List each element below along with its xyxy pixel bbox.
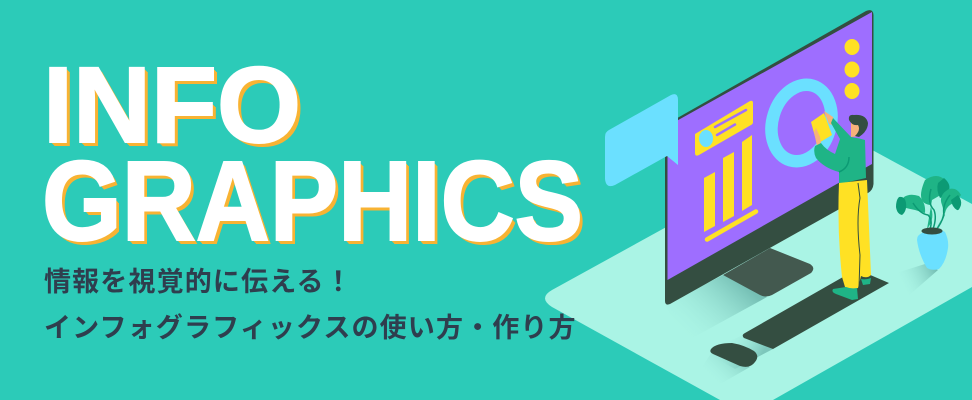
title and subtitle <box>42 44 583 343</box>
plant shadow <box>893 264 938 297</box>
screen <box>668 12 872 280</box>
monitor body <box>665 10 874 305</box>
hair <box>849 115 868 137</box>
trouser seam <box>858 183 860 288</box>
bar chart <box>704 135 756 240</box>
speech bubble <box>605 94 678 186</box>
monitor <box>665 10 874 305</box>
soil <box>922 228 942 234</box>
yellow dots <box>844 39 860 99</box>
profile card <box>695 101 753 156</box>
title: INFO: INFO <box>43 44 301 165</box>
plant <box>896 176 961 270</box>
keyboard <box>743 274 889 349</box>
subtitle line 1: 情報を視覚的に伝える！ <box>44 267 353 297</box>
person <box>811 111 871 300</box>
subtitle line 2: インフォグラフィックスの使い方・作り方 <box>44 313 577 343</box>
note <box>811 113 832 144</box>
trousers <box>838 180 871 289</box>
title: GRAPHICS: GRAPHICS <box>42 138 583 264</box>
sweater <box>814 118 866 184</box>
pot <box>917 228 948 270</box>
keyboard shadow <box>705 335 773 369</box>
desk platform <box>545 132 972 400</box>
neck and face <box>851 119 862 137</box>
left hand <box>814 128 821 146</box>
shoes <box>832 287 858 300</box>
leaves <box>921 176 947 229</box>
right hand <box>824 111 836 126</box>
monitor shadow <box>665 275 767 342</box>
mouse <box>710 343 757 367</box>
sweater fold <box>839 157 849 172</box>
monitor stand <box>723 248 813 296</box>
mouse shadow <box>700 352 750 387</box>
ring chart <box>762 77 841 169</box>
